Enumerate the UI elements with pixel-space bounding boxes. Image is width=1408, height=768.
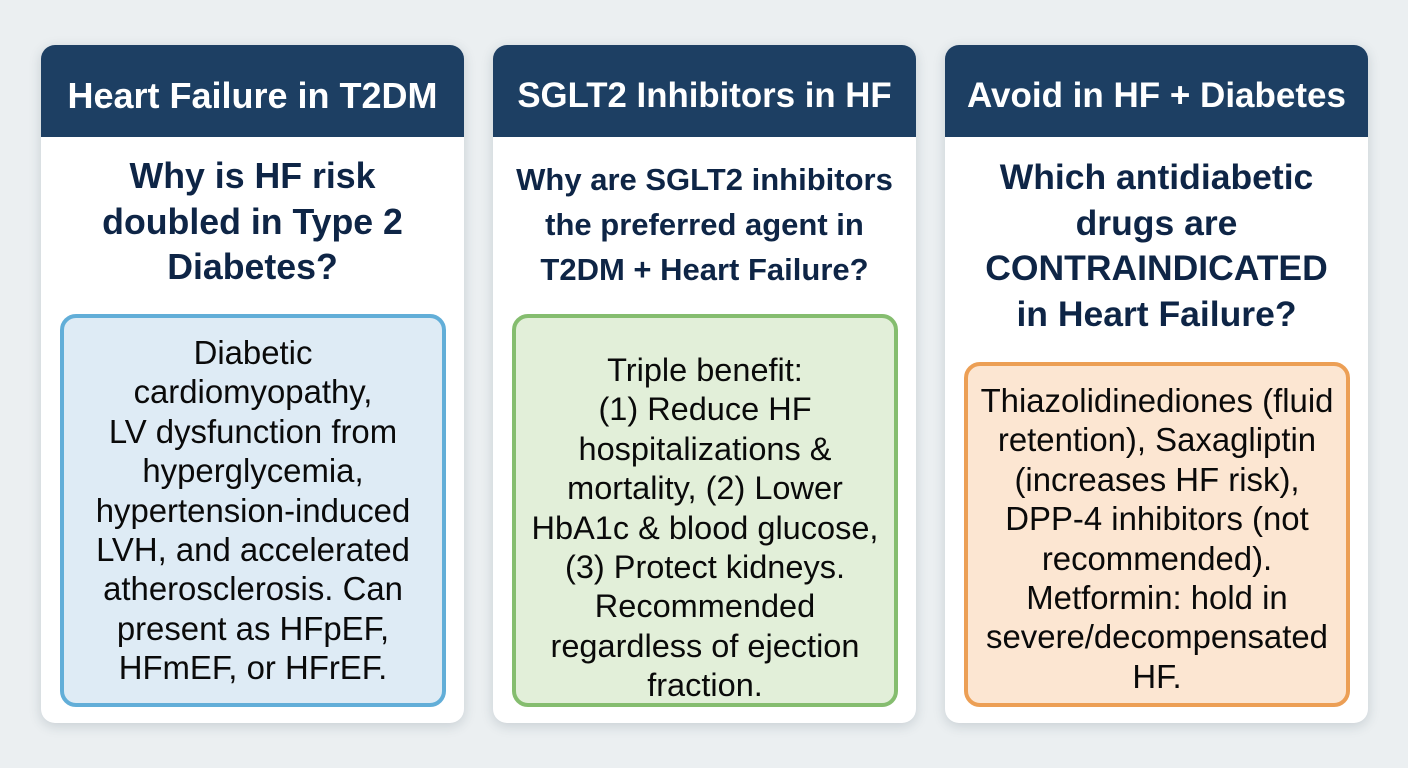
- answer box: contraindicated drugs: HF.: [1132, 658, 1182, 695]
- heading: Avoid in HF + Diabetes: Avoid in HF + Diabetes: [967, 76, 1346, 115]
- answer box: diabetic cardiomyopathy: hypertension-induced: [96, 492, 410, 529]
- answer box: diabetic cardiomyopathy: LV dysfunction from: [109, 413, 397, 450]
- answer box: triple benefit: Recommended: [595, 588, 815, 624]
- question: why SGLT2 inhibitors preferred: the preferred agent in: [545, 207, 864, 242]
- answer box: diabetic cardiomyopathy: Diabetic: [194, 334, 312, 371]
- answer box: contraindicated drugs: recommended).: [1042, 540, 1272, 577]
- answer box: contraindicated drugs: (increases HF risk),: [1014, 461, 1300, 498]
- question: why is HF risk doubled: doubled in Type 2: [102, 202, 403, 242]
- panel: SGLT2 inhibitors in HF: [493, 45, 916, 723]
- question: why SGLT2 inhibitors preferred: T2DM + Heart Failure?: [540, 252, 869, 287]
- question: which drugs contraindicated: drugs are: [1076, 203, 1237, 243]
- question: why is HF risk doubled: [102, 156, 403, 287]
- heading: SGLT2 Inhibitors in HF: SGLT2 Inhibitors in HF: [517, 76, 892, 115]
- question: which drugs contraindicated: [985, 157, 1328, 334]
- heading: Heart Failure in T2DM: [41, 45, 464, 137]
- answer box: diabetic cardiomyopathy: present as HFpEF,: [117, 610, 389, 647]
- answer box: triple benefit: mortality, (2) Lower: [567, 470, 843, 506]
- question: which drugs contraindicated: Which antidiabetic: [1000, 157, 1313, 197]
- answer box: triple benefit: regardless of ejection: [551, 628, 859, 664]
- question: which drugs contraindicated: in Heart Failure?: [1016, 294, 1297, 334]
- question: why is HF risk doubled: Why is HF risk: [130, 156, 375, 196]
- answer box: contraindicated drugs: DPP-4 inhibitors (not: [1005, 500, 1309, 537]
- answer box: triple benefit: Triple benefit:: [607, 352, 803, 388]
- answer box: diabetic cardiomyopathy: [60, 314, 446, 707]
- answer box: triple benefit: hospitalizations &: [579, 431, 831, 467]
- answer box: contraindicated drugs: retention), Saxagliptin: [998, 421, 1316, 458]
- question: why SGLT2 inhibitors preferred: [516, 162, 893, 287]
- question: why is HF risk doubled: Diabetes?: [167, 247, 338, 287]
- answer box: triple benefit: (1) Reduce HF: [598, 391, 812, 427]
- question: why SGLT2 inhibitors preferred: Why are SGLT2 inhibitors: [516, 162, 893, 197]
- panel: heart failure in T2DM: [41, 45, 464, 723]
- answer box: triple benefit: fraction.: [647, 667, 763, 703]
- panel: avoid in HF + diabetes: [945, 45, 1368, 723]
- answer box: contraindicated drugs: Thiazolidinediones (fluid: [981, 382, 1333, 419]
- answer box: triple benefit: (3) Protect kidneys.: [565, 549, 845, 585]
- answer box: contraindicated drugs: Metformin: hold in: [1026, 579, 1288, 616]
- answer box: diabetic cardiomyopathy: hyperglycemia,: [142, 452, 364, 489]
- heading: Avoid in HF + Diabetes: [945, 45, 1368, 137]
- answer box: triple benefit: [512, 314, 898, 707]
- answer box: diabetic cardiomyopathy: atherosclerosis. Can: [103, 570, 403, 607]
- question: which drugs contraindicated: CONTRAINDICATED: [985, 248, 1328, 288]
- heading: SGLT2 Inhibitors in HF: [493, 45, 916, 137]
- answer box: triple benefit: HbA1c & blood glucose,: [532, 510, 878, 546]
- answer box: diabetic cardiomyopathy: cardiomyopathy,: [134, 373, 372, 410]
- answer box: diabetic cardiomyopathy: LVH, and accelerated: [96, 531, 410, 568]
- heading: Heart Failure in T2DM: Heart Failure in T2DM: [67, 75, 438, 116]
- answer box: diabetic cardiomyopathy: HFmEF, or HFrEF.: [119, 649, 387, 686]
- answer box: contraindicated drugs: severe/decompensated: [986, 618, 1328, 655]
- answer box: contraindicated drugs: [964, 362, 1350, 707]
